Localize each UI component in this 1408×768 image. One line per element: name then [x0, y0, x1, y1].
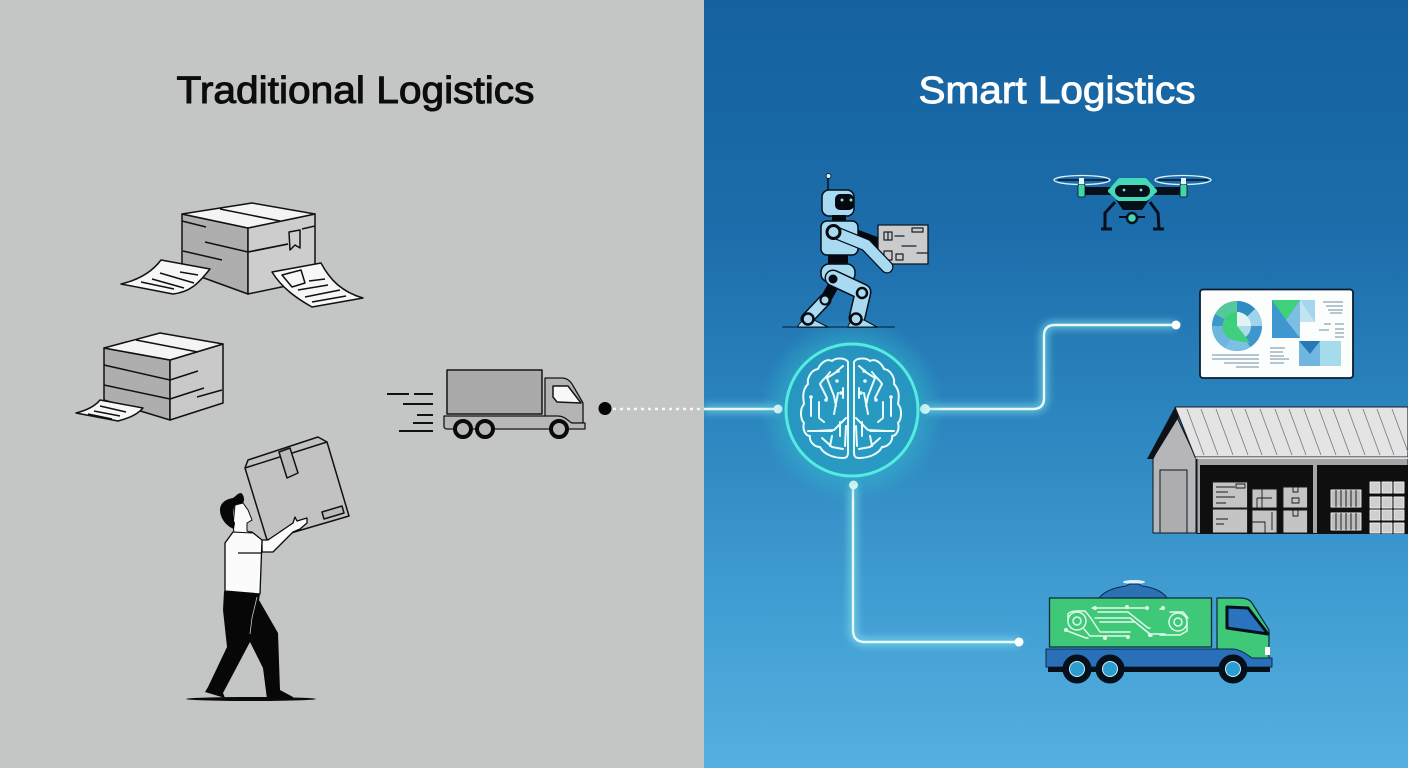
back foot — [798, 296, 830, 327]
paper: left document — [121, 260, 210, 294]
antenna — [826, 174, 831, 191]
front leg — [828, 274, 877, 327]
icon: warehouse building — [1147, 407, 1408, 534]
loading bay openings — [1200, 465, 1313, 534]
face — [233, 503, 252, 533]
dashboard text lines — [1212, 302, 1344, 367]
left hemisphere — [801, 358, 848, 458]
robot head — [822, 190, 854, 216]
stacked boxes left bay — [1212, 482, 1308, 533]
truck cab — [1217, 598, 1270, 660]
figure: man carrying a box — [186, 437, 349, 701]
hair — [220, 493, 244, 529]
icon: delivery drone — [1054, 176, 1211, 229]
title: Traditional Logistics: Traditional Logistics — [176, 70, 534, 112]
icon: traditional delivery truck — [444, 370, 585, 437]
parcel held by robot — [878, 225, 928, 264]
green cargo box — [1050, 598, 1212, 647]
front wall — [1197, 458, 1408, 534]
pallets right bay — [1330, 482, 1404, 533]
circuit pattern on cargo box — [1064, 605, 1188, 640]
side wall and door — [1147, 407, 1196, 533]
back limbs — [824, 230, 878, 302]
ground shadow — [186, 697, 316, 701]
corrugated roof — [1175, 407, 1408, 458]
panel: smart logistics background — [704, 0, 1408, 768]
pie chart — [1212, 301, 1262, 351]
panel: traditional logistics background — [0, 0, 704, 768]
trousers — [205, 591, 293, 699]
title: Smart Logistics: Smart Logistics — [918, 70, 1196, 112]
front arm — [834, 232, 887, 267]
roof sensor dome — [1099, 580, 1167, 598]
treemap blocks — [1272, 300, 1341, 366]
connectors: glowing circuit lines — [704, 320, 1180, 646]
connector: dotted link to smart side — [598, 402, 704, 415]
carried cardboard box — [245, 437, 349, 540]
icon: AI brain hub — [760, 318, 944, 502]
truck ground shadow — [1012, 683, 1316, 685]
wheels — [1066, 658, 1244, 680]
icon: smart autonomous truck — [1012, 580, 1316, 684]
icon: speed lines — [387, 394, 433, 431]
icon: small stacked box with paper — [76, 333, 223, 421]
icon: warehouse robot carrying parcel — [783, 174, 928, 327]
robot ground line — [783, 326, 894, 328]
robot torso — [821, 215, 858, 282]
panel: analytics dashboard — [1200, 290, 1353, 378]
right hemisphere — [854, 358, 901, 458]
blue chassis — [1046, 649, 1272, 667]
paper: right document — [272, 263, 363, 307]
shirt and arm — [225, 517, 307, 594]
icon: large box with papers — [121, 203, 363, 307]
paper: small document — [76, 400, 143, 421]
